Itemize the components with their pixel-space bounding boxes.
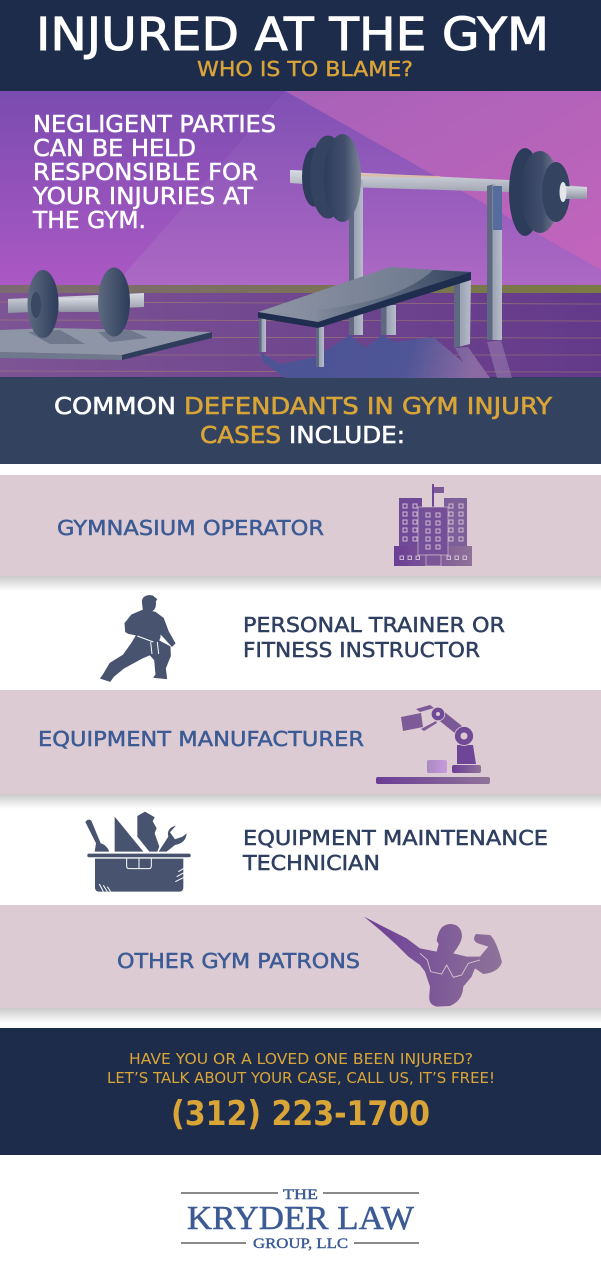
- icon: robot arm: [376, 705, 490, 784]
- call to action footer: [0, 1028, 601, 1155]
- dumbbell on platform: [0, 268, 212, 360]
- section heading: CASES: [200, 423, 281, 449]
- logo: GROUP, LLC: [253, 1236, 348, 1252]
- row: gymnasium operator: GYMNASIUM OPERATOR: [57, 516, 324, 540]
- row: other gym patrons: [0, 905, 601, 1023]
- logo: THE: [283, 1187, 318, 1203]
- row: other gym patrons: OTHER GYM PATRONS: [117, 949, 360, 973]
- bench shadow: [260, 335, 490, 378]
- phone number: (312) 223-1700: [171, 1094, 430, 1134]
- hero text: CAN BE HELD: [33, 134, 196, 162]
- section heading: INCLUDE:: [289, 423, 405, 449]
- row: equipment manufacturer: [0, 690, 601, 809]
- section heading: DEFENDANTS IN GYM INJURY: [184, 394, 553, 420]
- hero text: YOUR INJURIES AT: [32, 182, 254, 210]
- bench press rack: [258, 134, 587, 367]
- section heading: [0, 378, 601, 464]
- hero text: [32, 110, 276, 234]
- row: equipment manufacturer: EQUIPMENT MANUFACTURER: [38, 727, 364, 751]
- hero text: NEGLIGENT PARTIES: [33, 110, 276, 138]
- hero illustration panel: [0, 91, 601, 378]
- row: equipment maintenance technician: TECHNICIAN: [242, 851, 380, 875]
- row: personal trainer: PERSONAL TRAINER OR: [243, 613, 505, 637]
- row: equipment maintenance technician: EQUIPMENT MAINTENANCE: [243, 826, 548, 850]
- hero text: THE GYM.: [32, 206, 146, 234]
- call to action footer: LET’S TALK ABOUT YOUR CASE, CALL US, IT’S FREE!: [107, 1069, 495, 1087]
- header band: [0, 0, 601, 91]
- title: INJURED AT THE GYM: [36, 8, 549, 61]
- subtitle: WHO IS TO BLAME?: [197, 57, 413, 81]
- row: personal trainer: FITNESS INSTRUCTOR: [243, 638, 480, 662]
- row: equipment maintenance technician: [85, 812, 548, 892]
- hero text: RESPONSIBLE FOR: [33, 158, 258, 186]
- row: personal trainer: [101, 596, 505, 681]
- logo: KRYDER LAW: [187, 1200, 415, 1237]
- icon: bodybuilder: [364, 917, 502, 1007]
- call to action footer: HAVE YOU OR A LOVED ONE BEEN INJURED?: [129, 1050, 473, 1068]
- icon: martial artist: [101, 596, 175, 681]
- icon: toolbox: [85, 812, 191, 892]
- icon: building: [394, 484, 472, 566]
- row: gymnasium operator: [0, 475, 601, 591]
- section heading: COMMON: [54, 394, 176, 420]
- logo: [181, 1187, 419, 1252]
